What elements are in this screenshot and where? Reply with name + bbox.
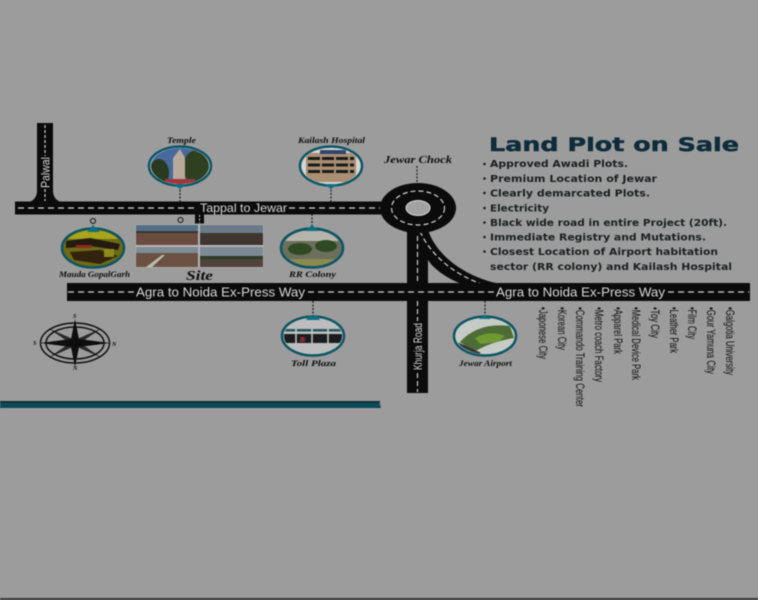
- vertical nearby-places list: •Medical Device Park: [629, 307, 643, 381]
- road: curved ramp: [417, 224, 500, 288]
- bottom edge line: [0, 598, 758, 600]
- feature list: sector (RR colony) and Kailash Hospital: [490, 262, 732, 273]
- feature list: [483, 159, 732, 273]
- vertical nearby-places list: •Galgotia University: [723, 307, 737, 375]
- bottom accent bar: [0, 401, 381, 408]
- icon: compass rose: S: [73, 314, 77, 320]
- marker: Mauda Gopalgarh: Mauda GopalGarh: [58, 269, 130, 279]
- vertical nearby-places list: •Japonese City: [536, 307, 550, 359]
- marker: Jewar Airport: Jewar Airport: [458, 358, 513, 368]
- vertical nearby-places list: •Metro coach Factory: [592, 307, 606, 382]
- feature list: Electricity: [490, 204, 550, 214]
- icon: compass rose: N: [111, 342, 117, 348]
- road: Agra to Noida Express Way: Agra to Noida Ex-Press Way: [496, 284, 666, 300]
- marker: Mauda Gopalgarh: [58, 218, 130, 279]
- road: Palwal: [29, 123, 61, 202]
- label: Site: Site: [186, 269, 213, 284]
- marker: RR Colony: [281, 225, 343, 279]
- road: Agra to Noida Express Way: [67, 283, 750, 301]
- heading: Land Plot on Sale: [489, 134, 739, 156]
- road: Tappal to Jewar: [15, 201, 386, 224]
- icon: compass rose: [33, 314, 117, 372]
- road: Tappal to Jewar: Tappal to Jewar: [200, 201, 287, 215]
- marker: Temple: Temple: [167, 135, 196, 145]
- label: Jewar Chock: Jewar Chock: [383, 154, 453, 166]
- marker: Kailash Hospital: [297, 135, 366, 189]
- vertical nearby-places list: •Film City: [685, 307, 699, 339]
- marker: Temple: [149, 135, 211, 189]
- marker: Toll Plaza: Toll Plaza: [291, 358, 337, 368]
- feature list: Premium Location of Jewar: [490, 174, 657, 185]
- road: Agra to Noida Express Way: Agra to Noida Ex-Press Way: [136, 284, 306, 300]
- vertical nearby-places list: •Korean City: [555, 307, 569, 350]
- feature list: Clearly demarcated Plots.: [490, 188, 650, 200]
- roundabout: [380, 183, 456, 233]
- vertical nearby-places list: •Gour Yamuna City: [704, 307, 718, 374]
- connector lines: [180, 166, 485, 318]
- road: Khurja Road: Khurja Road: [411, 323, 425, 370]
- marker: Kailash Hospital: Kailash Hospital: [297, 135, 366, 145]
- marker: Jewar Airport: [454, 315, 516, 368]
- road: Khurja Road: [407, 225, 428, 393]
- icon: compass rose: N: [72, 366, 78, 372]
- feature list: Closest Location of Airport habitation: [490, 247, 718, 258]
- marker: Toll Plaza: [282, 316, 344, 368]
- vertical nearby-places list: •Leather Park: [667, 307, 681, 354]
- marker: RR Colony: RR Colony: [288, 269, 336, 279]
- site photos: [136, 218, 264, 268]
- feature list: Immediate Registry and Mutations.: [490, 232, 706, 244]
- icon: compass rose: S: [33, 341, 37, 347]
- vertical nearby-places list: •Apparel Park: [611, 307, 625, 355]
- vertical nearby-places list: •Toy City: [648, 307, 662, 338]
- vertical nearby-places list: [536, 307, 737, 407]
- feature list: Approved Awadi Plots.: [490, 159, 628, 170]
- road: Palwal: Palwal: [38, 157, 52, 188]
- vertical nearby-places list: •Commando Training Center: [573, 307, 587, 407]
- feature list: Black wide road in entire Project (20ft).: [490, 218, 727, 229]
